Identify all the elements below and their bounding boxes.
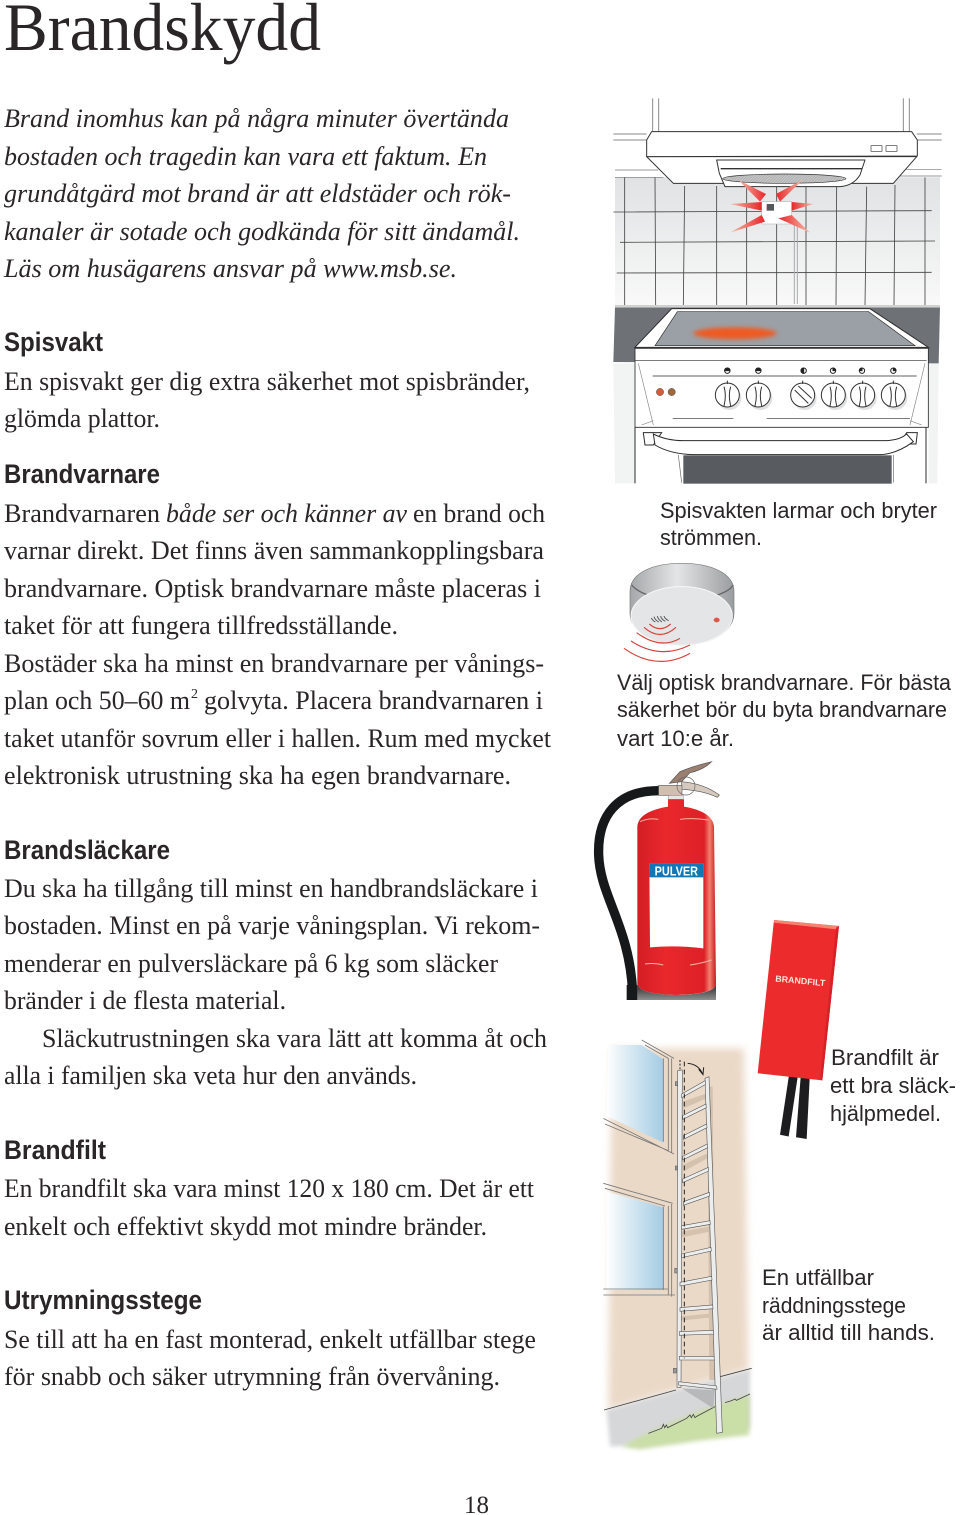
caption: räddningsstege [762,1265,935,1345]
hot plate glow [693,327,777,339]
caption: Välj optisk brandvarnare: Välj optisk brandvarnare. För bästa [617,670,952,695]
intro text block: grundåtgärd mot brand är att eldstäder och rök- [4,179,511,208]
caption: Brandfilt: ett bra släck- [830,1073,956,1098]
text block: Brandvarnare: golvyta. Placera brandvarnaren i [204,686,543,715]
ladder [677,1070,722,1433]
caption: Brandfilt [830,1045,956,1126]
heading: Brandvarnare: Brandvarnare [4,459,160,489]
hose [599,791,660,993]
stove body [635,309,928,484]
lower window [603,1183,675,1297]
text block: Brandvarnare: plan och 50–60 m [4,686,190,715]
text block: Brandvarnare: Bostäder ska ha minst en brandvarnare per vånings- [4,649,544,678]
heading: Utrymningsstege: Utrymningsstege [4,1285,202,1315]
knob symbols [725,368,896,373]
side walls beside stove [613,363,939,483]
text block: Brandsläckare: bostaden. Minst en på varje våningsplan. Vi rekom- [4,911,540,940]
caption: Välj optisk brandvarnare [617,670,952,751]
text block: Brandsläckare: bränder i de flesta material. [4,986,286,1015]
text block: Brandvarnare [4,499,552,790]
intro text block: Läs om husägarens ansvar på www.msb.se. [3,254,457,283]
ladder shadow [680,1087,715,1408]
caption: räddningsstege: En utfällbar [762,1265,874,1290]
intro text block: bostaden och tragedin kan vara ett faktum. En [4,142,487,171]
text block: Brandsläckare: menderar en pulversläckare på 6 kg som släcker [4,949,498,978]
text block: Brandvarnare: 2 [191,687,198,702]
illustration: fire extinguisher [599,762,719,1000]
caption: Välj optisk brandvarnare: vart 10:e år. [617,726,734,751]
intro text block: Brand inomhus kan på några minuter övertända [4,104,509,133]
text block: Utrymningsstege: Se till att ha en fast monterad, enkelt utfällbar stege [4,1325,536,1354]
text block: Brandvarnare: taket för att fungera tillfredsställande. [4,611,398,640]
text block: Brandvarnare: varnar direkt. Det finns även sammankopplingsbara [4,536,544,565]
heading: Spisvakt: Spisvakt [4,327,103,357]
upper window [603,1040,674,1154]
intro text block [3,104,520,283]
text block: Brandsläckare [4,874,547,1090]
heading: Brandsläckare: Brandsläckare [4,835,170,865]
text block: Brandvarnare: både ser och känner av [166,499,407,528]
caption: Spisvakten: strömmen. [660,525,762,550]
caption: Brandfilt: Brandfilt är [831,1045,939,1070]
heading: Brandfilt: Brandfilt [4,1135,106,1165]
cylinder [637,799,716,995]
caption: räddningsstege: är alltid till hands. [762,1320,935,1345]
caption: Spisvakten [660,498,937,550]
illustration: fire blanket [758,920,839,1139]
text block: Brandvarnare: en brand och [413,499,545,528]
text block: Brandvarnare: brandvarnare. Optisk brandvarnare måste placeras i [4,574,541,603]
illustration: fold-out escape ladder [603,1040,752,1449]
caption: räddningsstege: räddningsstege [762,1293,906,1318]
caption: Välj optisk brandvarnare: säkerhet bör du byta brandvarnare [617,697,947,722]
control knobs [715,381,905,407]
text block: Brandsläckare: Släckutrustningen ska vara lätt att komma åt och [42,1024,547,1053]
indicator lights [656,388,675,396]
text block: Spisvakt: En spisvakt ger dig extra säkerhet mot spisbränder, [4,367,530,396]
countertop [613,307,940,363]
caption: Brandfilt: hjälpmedel. [830,1101,941,1126]
text block: Utrymningsstege: för snabb och säker utrymning från övervåning. [4,1362,500,1391]
ground [604,1368,752,1449]
text block: Brandfilt: enkelt och effektivt skydd mot mindre bränder. [4,1212,487,1241]
text block: Utrymningsstege [4,1325,536,1391]
text block: Spisvakt [4,367,530,433]
text block: Brandsläckare: Du ska ha tillgång till minst en handbrandsläckare i [4,874,538,903]
illustration: stove with stove guard [613,98,942,484]
stove guard alarm with red rays [730,179,813,233]
intro text block: kanaler är sotade och godkända för sitt ändamål. [4,217,520,246]
illustration: fire blanket: BRANDFILT [775,973,826,988]
text block: Brandsläckare: alla i familjen ska veta hur den används. [4,1061,417,1090]
text block: Brandvarnare: taket utanför sovrum eller i hallen. Rum med mycket [4,724,552,753]
facade [608,1048,748,1410]
tiled wall [613,169,942,306]
fold direction indicator [680,1060,704,1358]
text block: Brandvarnare: elektronisk utrustning ska ha egen brandvarnare. [4,761,511,790]
text block: Brandfilt [4,1174,535,1241]
label [649,863,703,948]
straps [780,1075,798,1136]
text block: Brandvarnare: Brandvarnaren [4,499,160,528]
range hood [613,98,942,187]
handle and valve [659,762,719,799]
red case [758,920,839,1080]
sound waves [624,624,690,661]
illustration: fire extinguisher: PULVER [655,865,698,879]
caption: Spisvakten: Spisvakten larmar och bryter [660,498,937,523]
illustration: smoke detector [624,563,734,661]
knob shadows [717,386,907,410]
status lamp [714,618,720,622]
brackets [673,1082,678,1373]
text block: Spisvakt: glömda plattor. [4,404,160,433]
text block: Brandfilt: En brandfilt ska vara minst 120 x 180 cm. Det är ett [4,1174,535,1203]
perforations [651,616,669,622]
